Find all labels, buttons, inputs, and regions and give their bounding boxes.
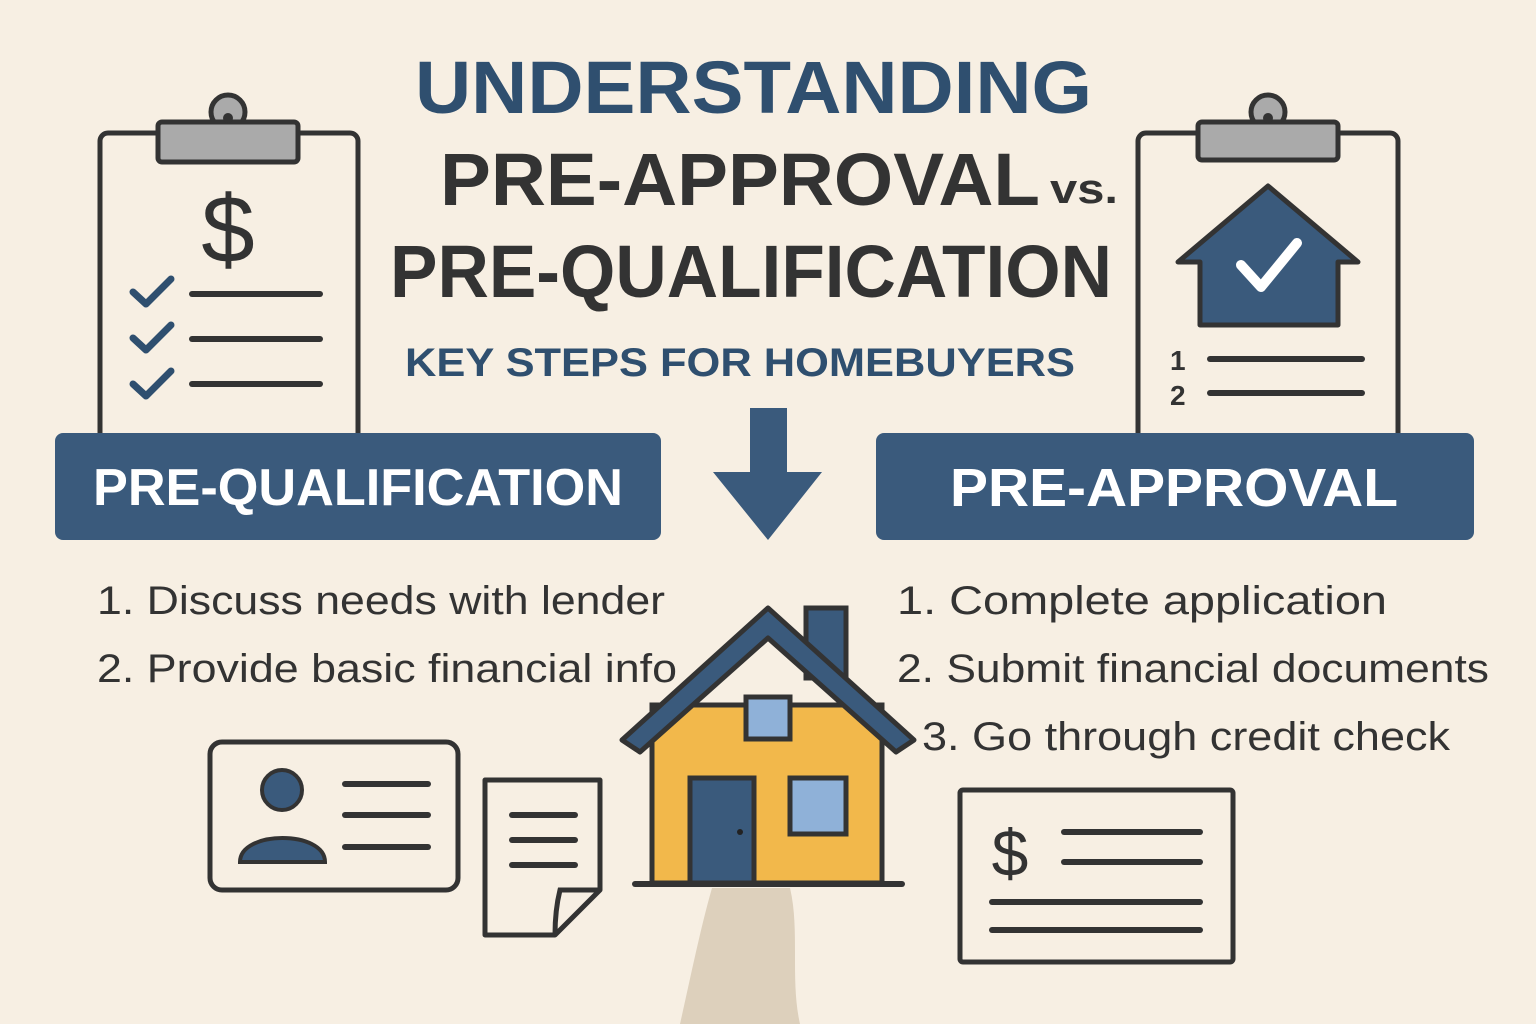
- icon: check: [960, 790, 1233, 962]
- banner: pre-qualification: [55, 433, 661, 540]
- icon: right clipboard: [1138, 95, 1398, 453]
- list: pre-approval steps: 3. Go through credit check: [922, 715, 1451, 759]
- list: pre-qualification steps: 2. Provide basic financial info: [97, 647, 677, 691]
- list: pre-approval steps: 1. Complete application: [897, 579, 1387, 623]
- icon: left clipboard: [100, 95, 358, 453]
- list: pre-qualification steps: 1. Discuss needs with lender: [97, 579, 665, 623]
- title: PRE-QUALIFICATION: [390, 230, 1112, 313]
- path under house: [680, 888, 800, 1024]
- icon: right clipboard: 2: [1170, 380, 1186, 411]
- banner: pre-approval: PRE-APPROVAL: [950, 458, 1398, 518]
- banner: pre-approval: [876, 433, 1474, 540]
- subtitle: KEY STEPS FOR HOMEBUYERS: [405, 341, 1075, 385]
- icon: document: [485, 780, 600, 935]
- list: pre-qualification steps: [97, 579, 677, 691]
- title: vs.: [1050, 165, 1118, 212]
- icon: house: [622, 608, 914, 884]
- icon: left clipboard: $: [201, 176, 255, 283]
- icon: right clipboard: 1: [1170, 345, 1186, 376]
- banner: pre-qualification: PRE-QUALIFICATION: [93, 459, 623, 517]
- title: PRE-APPROVAL: [440, 138, 1040, 221]
- arrow: down: [713, 408, 822, 540]
- title: [390, 46, 1118, 313]
- icon: check: $: [992, 816, 1028, 890]
- list: pre-approval steps: [897, 579, 1489, 759]
- list: pre-approval steps: 2. Submit financial documents: [897, 647, 1489, 691]
- icon: ID card: [210, 742, 458, 890]
- title: UNDERSTANDING: [415, 46, 1092, 129]
